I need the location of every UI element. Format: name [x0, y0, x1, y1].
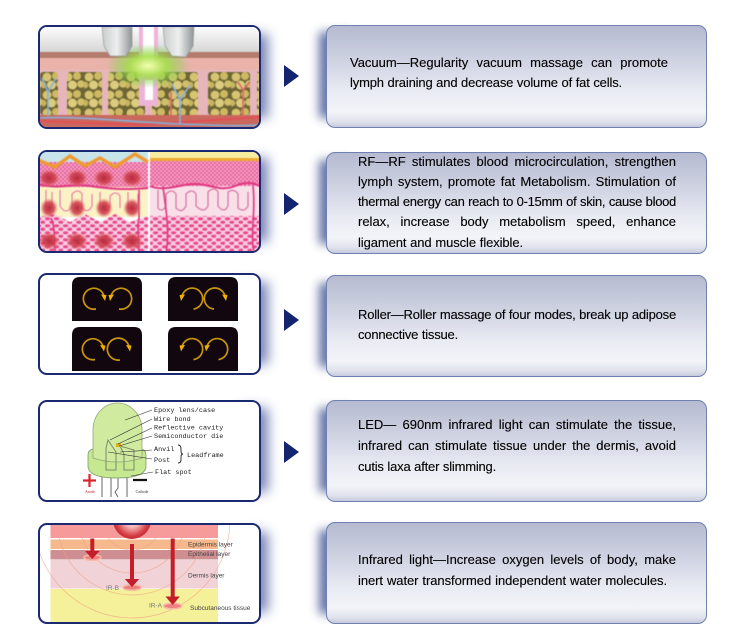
- panel: RF skin illustration: [38, 150, 261, 253]
- panel: LED text box: [326, 400, 707, 502]
- text: LED: infrared can stimulate tissue under the dermis, avoid: [358, 438, 676, 452]
- penetration arrows: [85, 538, 180, 605]
- semiconductor die: [116, 443, 121, 447]
- text: RF: [358, 154, 676, 250]
- brace: [178, 445, 183, 463]
- LED labels: Leadframe: [187, 452, 224, 460]
- layer labels: Dermis layer: [188, 572, 225, 580]
- tip spots: [84, 555, 182, 609]
- text: vacuum: [350, 54, 668, 90]
- layer labels: [106, 542, 251, 612]
- left half: treated skin: [38, 150, 148, 253]
- LED labels: Wire bond: [154, 416, 191, 424]
- text: LED: LED— 690nm infrared light can stimulate the tissue,: [358, 416, 676, 432]
- panel: RF text box: [326, 152, 707, 254]
- text: RF: thermal energy can reach to 0-15mm of skin, cause blood: [358, 194, 676, 209]
- text: roller: Roller—Roller massage of four modes, break up adipose: [358, 306, 676, 322]
- anode plus: Anode: [85, 490, 95, 494]
- blood vessels: [40, 78, 262, 126]
- roller mode tile: top left: [72, 277, 142, 321]
- panel: LED diagram: [38, 400, 261, 502]
- text: infrared: inert water transformed independent water molecules.: [358, 572, 667, 588]
- heat spots: [38, 169, 143, 250]
- leader lines: [108, 410, 153, 476]
- vacuum probes: [102, 27, 194, 57]
- panel: roller text box: [326, 275, 707, 377]
- green glow: [106, 44, 190, 88]
- LED labels: Epoxy lens/case: [154, 407, 215, 415]
- LED labels: Post: [154, 457, 170, 465]
- panel: roller modes illustration: [38, 273, 261, 375]
- cathode minus: Cathode: [136, 490, 149, 494]
- roller mode tile: top right: [168, 277, 238, 321]
- beam: [139, 26, 158, 106]
- text: vacuum: Vacuum—Regularity vacuum massage can promote: [350, 54, 668, 70]
- LED dome: [93, 403, 142, 462]
- panel: vacuum illustration: [38, 25, 261, 129]
- arrow 2: [284, 193, 299, 215]
- layer labels: Epithelial layer: [188, 551, 231, 558]
- anode plus: [83, 474, 96, 494]
- text: RF: ligament and muscle flexible.: [358, 234, 523, 250]
- skin layers: [50, 523, 218, 623]
- right half: normal skin: [150, 150, 262, 253]
- LED labels: Semiconductor die: [154, 433, 223, 441]
- LED labels: Reflective cavity: [154, 424, 223, 432]
- text: infrared: [358, 552, 676, 588]
- text: roller: connective tissue.: [358, 327, 458, 342]
- septa tissue: [38, 70, 261, 116]
- LED base: [88, 449, 146, 478]
- lower tissue: [38, 115, 261, 129]
- text: RF: lymph system, promote fat Metabolism. Stimulation of: [358, 174, 676, 189]
- LED labels: Anvil: [154, 446, 174, 454]
- text: LED: cutis laxa after slimming.: [358, 458, 496, 474]
- LED legs: [102, 476, 127, 497]
- roller mode tile: bottom right: [168, 327, 238, 371]
- arrow 3: [284, 309, 299, 331]
- layer labels: IR-A: [149, 602, 163, 610]
- layer labels: Subcutaneous tissue: [190, 605, 251, 612]
- text: vacuum: lymph draining and decrease volume of fat cells.: [350, 74, 622, 90]
- skin layers: [38, 52, 261, 71]
- LED labels: [154, 407, 224, 477]
- cathode minus: [133, 480, 149, 494]
- arrow 4: [284, 441, 299, 463]
- fat chambers: [40, 72, 262, 115]
- panel: infrared text box: [326, 522, 707, 624]
- infrared source: [113, 501, 151, 539]
- text: RF: relax, increase body metabolism speed, enhance: [358, 214, 676, 229]
- text: infrared: Infrared light—Increase oxygen levels of body, make: [358, 552, 676, 566]
- roller mode tile: bottom left: [72, 327, 142, 371]
- panel: vacuum text box: [326, 25, 707, 128]
- LED lead frame: [106, 440, 134, 470]
- arrow 1: [284, 65, 299, 87]
- panel: infrared layers diagram: [38, 523, 261, 624]
- LED labels: Flat spot: [155, 469, 192, 477]
- text: roller: [358, 306, 676, 342]
- layer labels: IR-B: [106, 585, 119, 592]
- heat rings: [34, 422, 230, 618]
- layer labels: Epidermis layer: [188, 542, 234, 548]
- text: LED: [358, 416, 676, 474]
- background sky: [38, 25, 261, 53]
- text: RF: RF—RF stimulates blood microcirculation, strengthen: [358, 154, 676, 168]
